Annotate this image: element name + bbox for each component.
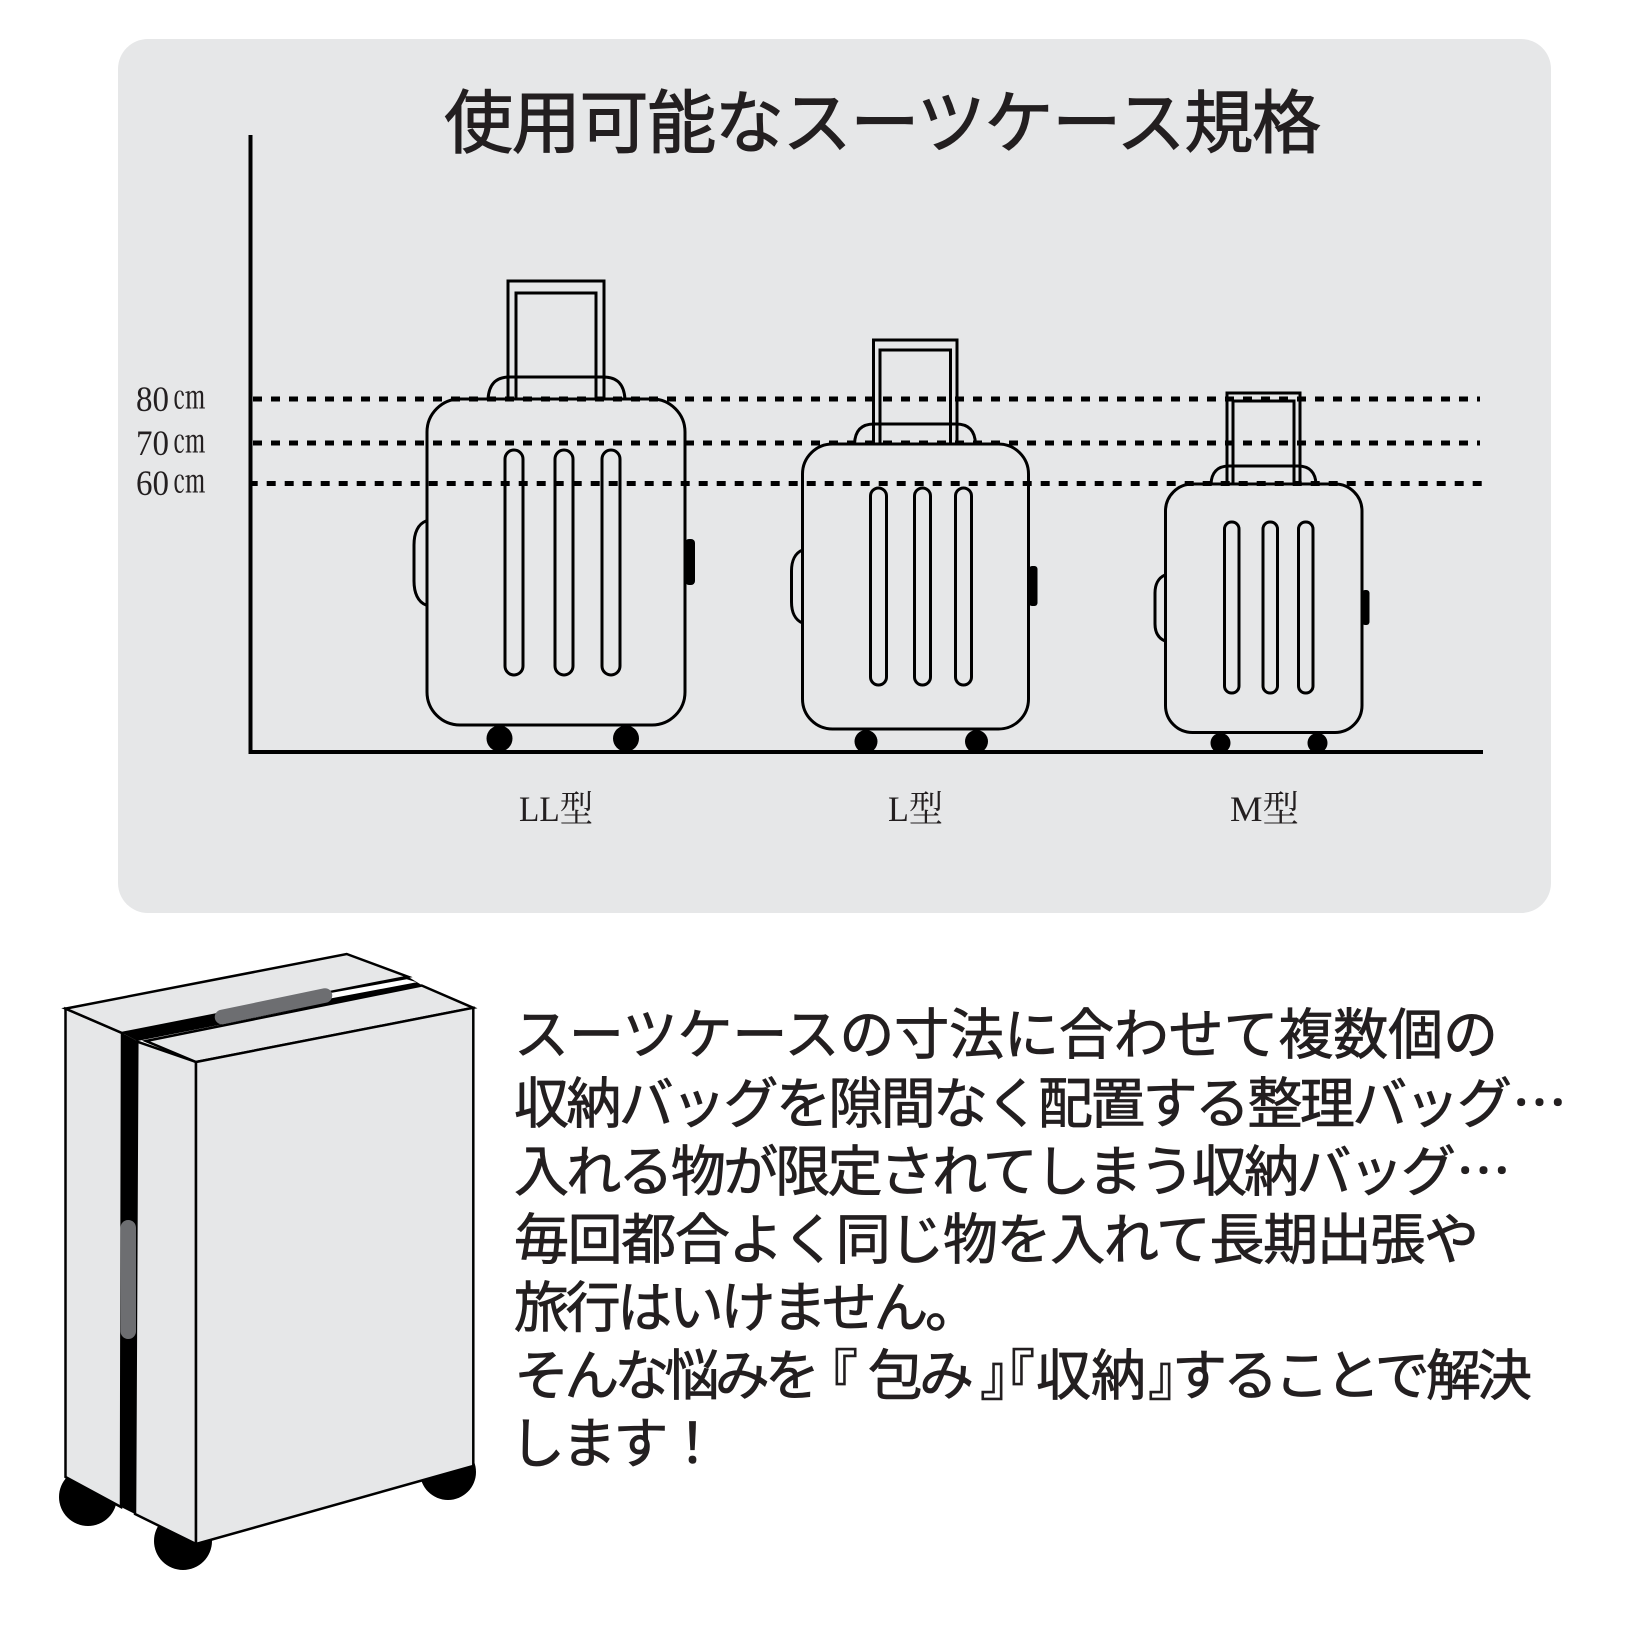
line 5: 旅行はいけません。	[514, 1277, 980, 1339]
illustration: wrapped suitcase bag	[59, 954, 476, 1570]
rear top face	[66, 954, 408, 1033]
line 6: 包み	[868, 1345, 974, 1407]
panel background	[118, 39, 1551, 913]
line 6: 『	[803, 1345, 858, 1407]
line 6: そんな悩みを	[514, 1345, 820, 1407]
label L type: L型	[888, 789, 943, 829]
black top strap	[122, 977, 422, 1041]
black vertical strap	[121, 1033, 137, 1514]
front main face	[196, 1008, 473, 1544]
height label 80cm: ㎝	[173, 379, 205, 415]
L suitcase	[792, 340, 1038, 753]
front side face	[135, 1042, 196, 1544]
side grey handle	[120, 1220, 136, 1339]
line 2: 収納バッグを隙間なく配置する整理バッグ	[514, 1073, 1512, 1135]
line 6: 『	[980, 1345, 1035, 1407]
line 6: することで解決	[1172, 1345, 1532, 1407]
line 3: 入れる物が限定されてしまう収納バッグ	[514, 1141, 1456, 1203]
line 6: 収納	[1036, 1345, 1146, 1407]
line 6: 』	[980, 1345, 1035, 1407]
label LL type: LL型	[519, 789, 593, 829]
height label 70cm: ㎝	[173, 423, 205, 459]
front top face	[146, 986, 473, 1062]
label M type: M型	[1230, 789, 1299, 829]
body text	[510, 1004, 1567, 1475]
LL suitcase	[414, 281, 695, 752]
line 4: 毎回都合よく同じ物を入れて長期出張や	[514, 1209, 1479, 1271]
height label 70cm: 70	[136, 423, 169, 463]
line 7: します！	[510, 1413, 720, 1475]
height label 60cm: ㎝	[173, 463, 205, 499]
height label 60cm: 60	[136, 463, 169, 503]
wheels	[59, 1444, 476, 1570]
chart axes	[250, 135, 1483, 752]
top grey handle	[222, 996, 325, 1017]
height label 80cm: 80	[136, 379, 169, 419]
line 6: 』	[1148, 1345, 1203, 1407]
dashed height lines	[249, 399, 1483, 484]
M suitcase	[1155, 393, 1370, 753]
title: 使用可能なスーツケース規格	[444, 85, 1321, 162]
white gap in top strap	[325, 979, 417, 1000]
line 1: スーツケースの寸法に合わせて複数個の	[514, 1004, 1498, 1066]
rear side face	[66, 1009, 122, 1507]
line 3: …	[1456, 1127, 1511, 1207]
panel: suitcase size chart	[118, 39, 1551, 913]
line 2: …	[1512, 1059, 1567, 1139]
